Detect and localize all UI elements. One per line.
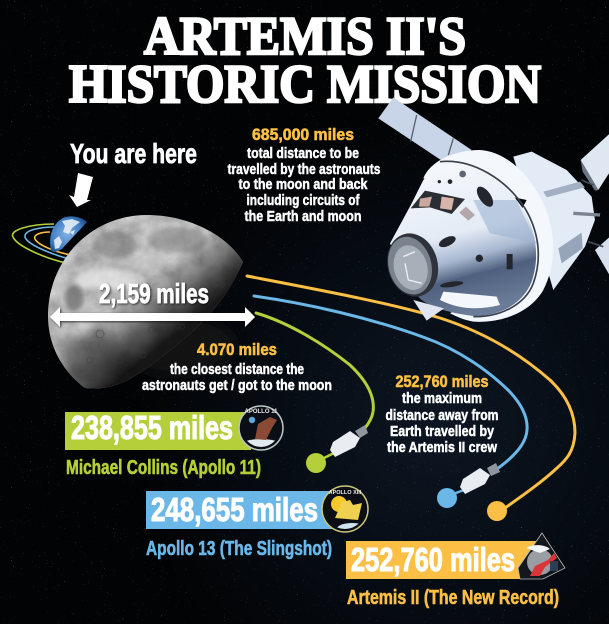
text block: closest distance: astronauts get / got to the moon [142,377,332,394]
caption: Michael Collins: Michael Collins (Apollo 11) [66,457,261,479]
docking nose [380,228,445,302]
text block: maximum distance: the maximum [402,390,482,407]
text block: closest distance: 4.070 miles [197,340,277,359]
text block: total distance: total distance to be [247,145,359,162]
icon: white arrow pointing to Earth [69,173,93,207]
text block: closest distance [142,340,332,394]
windows [411,191,475,221]
rim dark edge [440,161,538,317]
cone reflections [440,200,537,308]
badge: Apollo 13 [322,486,368,537]
service module [513,152,603,290]
marker: Artemis II dot [487,501,507,521]
marker: Apollo 13 capsule and dot [437,463,500,508]
text block: total distance: to the moon and back [238,176,368,193]
label: moon diameter: 2,159 miles [99,278,209,309]
trajectory lines [247,276,575,508]
blue trajectory [254,296,527,469]
marker: Apollo 11 capsule and dot [306,425,368,473]
text block: total distance [228,125,380,225]
text block: maximum distance: the Artemis II crew [387,439,497,456]
text block: maximum distance [386,372,498,456]
right solar panels [581,133,609,276]
orbit rings [13,224,71,263]
text block: closest distance: the closest distance the [170,361,304,378]
icon: Earth [50,216,87,252]
title [69,6,541,114]
moon [48,215,243,388]
badge: Apollo 13: APOLLO XIII [329,490,362,496]
Orion spacecraft [378,97,609,322]
green trajectory [256,313,373,428]
bar: Michael Collins: 238,855 miles [71,409,233,446]
bar: Apollo 13: 248,655 miles [151,491,318,528]
badge: Apollo 11 [239,406,283,451]
moon diameter arrow [50,307,255,327]
front triangle fin [413,300,444,321]
caption: Artemis II: Artemis II (The New Record) [347,587,559,609]
badge: Artemis II [518,533,565,579]
text block: maximum distance: 252,760 miles [396,372,488,391]
text block: total distance: including circuits of [246,192,360,209]
crew module rim [423,150,553,322]
title: HISTORIC MISSION [69,54,541,114]
title: ARTEMIS II'S [144,6,466,66]
crew module cone [390,162,536,316]
text block: maximum distance: Earth travelled by [390,423,495,440]
text block: total distance: travelled by the astronauts [228,161,380,178]
text block: maximum distance: distance away from [386,407,498,424]
text block: total distance: the Earth and moon [244,208,362,225]
caption: Apollo 13: Apollo 13 (The Slingshot) [146,538,332,560]
upper solar panel [378,97,472,162]
text block: total distance: 685,000 miles [252,125,354,144]
badge: Apollo 11: APOLLO 11 [244,409,278,415]
hatch details [437,171,513,289]
yellow trajectory [247,276,575,508]
bar: Artemis II: 252,760 miles [351,541,515,578]
label: you are here: You are here [70,138,197,169]
